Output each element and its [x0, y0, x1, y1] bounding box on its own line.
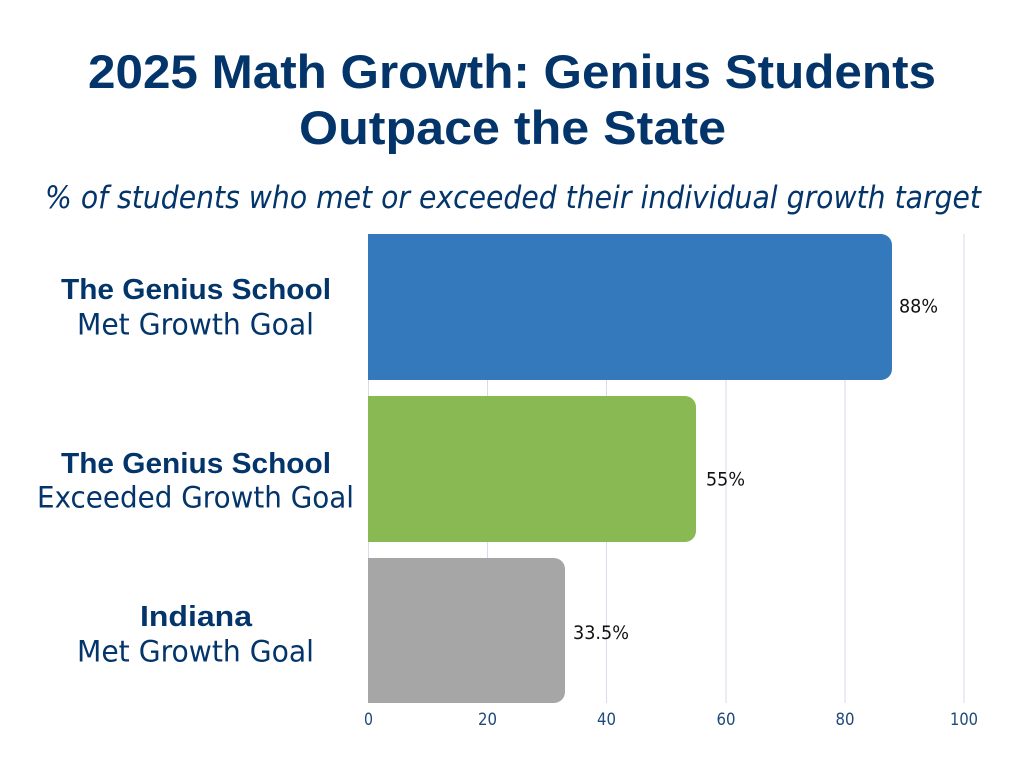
category label: Genius met: Met Growth Goal	[77, 308, 314, 342]
value labels: 33.5%	[573, 623, 629, 644]
x axis labels: 80	[836, 710, 854, 730]
x axis labels: 20	[478, 710, 497, 730]
x axis labels: 60	[716, 710, 736, 730]
value labels: 88%	[899, 296, 938, 318]
category label: Genius met: The Genius School	[61, 274, 331, 306]
x axis labels: 40	[597, 710, 616, 730]
category label: Indiana: Indiana	[140, 601, 253, 633]
x axis labels: 0	[364, 710, 373, 730]
value labels: 55%	[706, 470, 745, 490]
value labels	[573, 296, 938, 644]
category label: Genius exceeded: Exceeded Growth Goal	[37, 480, 354, 514]
category label: Genius met	[61, 274, 331, 342]
title	[88, 45, 936, 154]
x axis labels	[364, 710, 978, 730]
x axis labels: 100	[950, 710, 978, 730]
category label: Indiana	[77, 601, 314, 668]
category label: Genius exceeded: The Genius School	[61, 448, 331, 480]
bar: Indiana met growth goal	[368, 558, 565, 703]
category label: Indiana: Met Growth Goal	[77, 634, 314, 668]
category label: Genius exceeded	[37, 448, 354, 514]
bar: Genius met growth goal	[368, 234, 892, 380]
bar: Genius exceeded growth goal	[368, 396, 696, 542]
bar chart	[364, 234, 978, 730]
title: Outpace the State	[299, 101, 726, 154]
title: 2025 Math Growth: Genius Students	[88, 45, 936, 98]
